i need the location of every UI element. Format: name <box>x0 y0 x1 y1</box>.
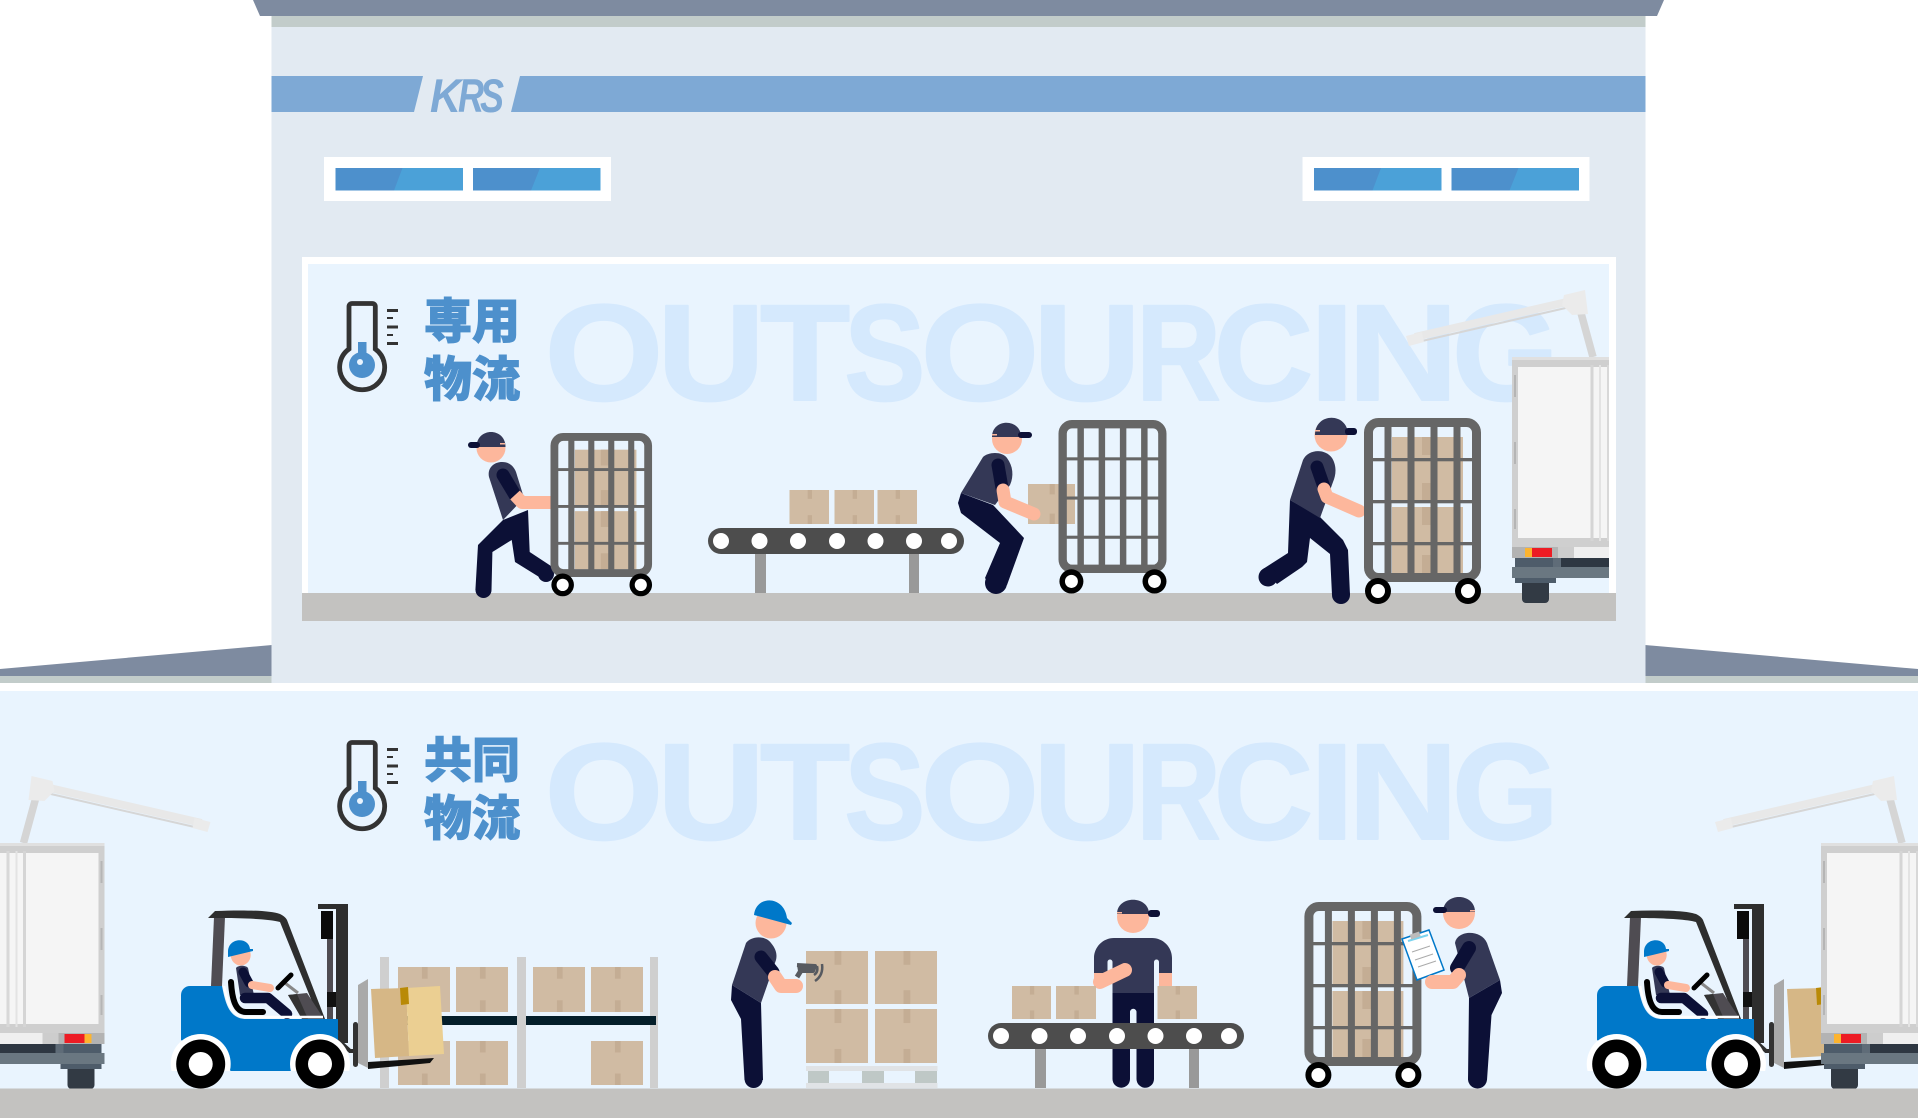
heading: 専用物流: 専用 <box>424 296 520 349</box>
KRS signage band: K <box>430 69 464 122</box>
heading: 専用物流 <box>424 296 520 407</box>
watermark OUTSOURCING upper: O <box>545 277 663 430</box>
watermark OUTSOURCING upper: G <box>1452 277 1559 430</box>
window left <box>324 157 611 201</box>
worker at conveyor <box>1094 900 1172 1088</box>
watermark OUTSOURCING upper: I <box>1309 277 1355 430</box>
worker pushing cage 3 <box>1258 418 1359 604</box>
watermark OUTSOURCING lower: R <box>1136 716 1221 869</box>
truck lower left with dock arm <box>0 776 210 1089</box>
watermark OUTSOURCING upper: N <box>1348 277 1458 430</box>
watermark OUTSOURCING upper: U <box>1033 277 1141 430</box>
window right <box>1302 157 1590 201</box>
side roof left <box>0 645 272 683</box>
conveyor upper with boxes <box>708 490 964 593</box>
watermark OUTSOURCING lower: G <box>1452 716 1559 869</box>
worker scanning boxes <box>731 900 796 1088</box>
watermark OUTSOURCING upper: U <box>657 277 765 430</box>
heading: 共同物流 <box>424 735 520 846</box>
watermark OUTSOURCING lower: S <box>844 716 925 869</box>
watermark OUTSOURCING upper: S <box>844 277 925 430</box>
watermark OUTSOURCING upper: T <box>760 277 850 430</box>
watermark OUTSOURCING lower: U <box>657 716 765 869</box>
worker with clipboard <box>1402 897 1502 1088</box>
panel: dedicated logistics room <box>302 257 1616 597</box>
forklift left <box>171 904 444 1094</box>
watermark OUTSOURCING lower: O <box>545 716 663 869</box>
roll cage empty 2 <box>1059 424 1166 594</box>
worker pushing cage <box>468 432 554 598</box>
KRS signage band: R <box>458 69 484 122</box>
watermark OUTSOURCING lower: O <box>921 716 1039 869</box>
icon: thermometer upper <box>340 304 398 390</box>
icon: thermometer lower <box>340 742 398 829</box>
heading: 専用物流: 物流 <box>424 354 520 407</box>
floor upper <box>302 593 1616 621</box>
watermark OUTSOURCING lower: T <box>760 716 850 869</box>
pallet with boxes <box>806 951 938 1088</box>
heading: 共同物流: 物流 <box>424 793 520 846</box>
heading: 共同物流: 共同 <box>424 735 520 788</box>
barcode scanner <box>797 964 822 981</box>
truck lower right with dock arm <box>1715 776 1918 1089</box>
truck upper with dock arm <box>1406 290 1618 603</box>
watermark OUTSOURCING lower: I <box>1309 716 1355 869</box>
KRS signage band: S <box>480 69 504 122</box>
conveyor lower with boxes <box>988 986 1244 1088</box>
KRS signage band <box>272 69 1646 122</box>
watermark OUTSOURCING lower: C <box>1214 716 1313 869</box>
box behind cage 2 <box>1028 484 1075 524</box>
forklift right <box>1587 904 1860 1094</box>
storage rack with boxes <box>380 957 658 1088</box>
building wall <box>272 27 1646 683</box>
watermark OUTSOURCING upper: R <box>1136 277 1221 430</box>
watermark OUTSOURCING lower: N <box>1348 716 1458 869</box>
floor lower <box>0 1088 1918 1118</box>
roll cage with boxes 3 <box>1365 422 1481 604</box>
watermark OUTSOURCING upper: O <box>921 277 1039 430</box>
watermark OUTSOURCING lower: U <box>1033 716 1141 869</box>
roll cage with boxes 4 <box>1305 906 1421 1088</box>
roof <box>253 0 1664 27</box>
panel: shared logistics area <box>0 683 1918 1089</box>
worker lifting box <box>958 423 1034 594</box>
side roof right <box>1645 645 1918 683</box>
watermark OUTSOURCING upper: C <box>1214 277 1313 430</box>
roll cage with boxes 1 <box>551 437 652 596</box>
